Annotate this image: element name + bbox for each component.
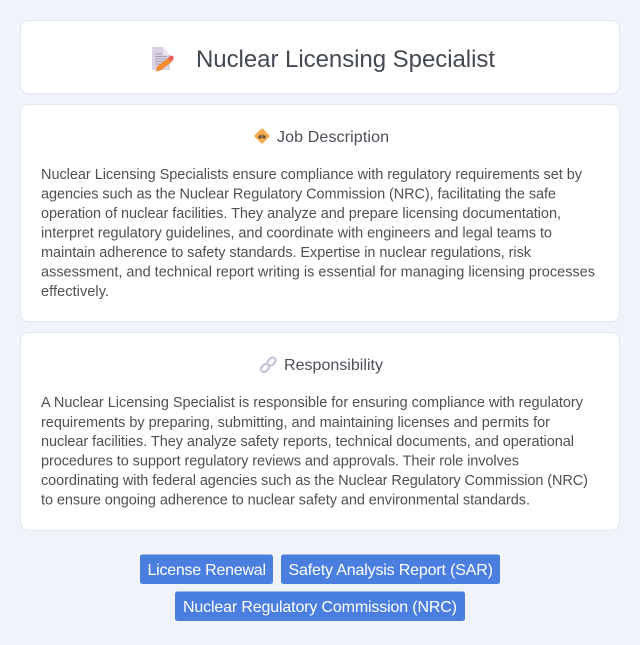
text block: responsibility [41,395,588,508]
icon: warning diamond [254,128,270,144]
text block: job description: effectively. [41,284,109,300]
text block: job description: maintain adherence to safety standards. Expertise in nuclear regulations, risk [41,245,532,261]
text block: job description: interpret regulatory guidelines, and coordinate with engineers and legal teams to [41,226,552,242]
text block: job description: Nuclear Licensing Specialists ensure compliance with regulatory requirements set by [41,167,583,183]
tag: safety analysis report: Safety Analysis Report (SAR) [288,562,493,579]
icon: document with pencil [152,47,174,72]
tag: safety analysis report [281,554,500,584]
icon: chain link [260,356,277,373]
panel: header [20,20,620,94]
text block: responsibility: A Nuclear Licensing Specialist is responsible for ensuring compliance with regulatory [41,395,584,411]
tag: license renewal: License Renewal [148,562,266,579]
title: Nuclear Licensing Specialist [196,46,495,73]
panel: job description [20,104,620,322]
text block: job description: assessment, and technical report writing is essential for managing licensing processes [41,264,595,280]
text block: responsibility: nuclear facilities. They analyze safety reports, technical documents, and operational [41,434,574,450]
text block: responsibility: requirements by preparing, submitting, and maintaining licenses and permits for [41,415,550,431]
text block: job description: agencies such as the Nuclear Regulatory Commission (NRC), facilitating the safe [41,186,556,202]
heading: job description: Job Description [277,129,389,146]
tag: nuclear regulatory commission [175,592,465,621]
text block: responsibility: coordinating with federal agencies such as the Nuclear Regulatory Commission (NRC) [41,473,588,489]
tag: license renewal [140,554,273,584]
tag: nuclear regulatory commission: Nuclear Regulatory Commission (NRC) [183,599,457,616]
heading: responsibility: Responsibility [284,357,383,374]
text block: job description [41,167,595,300]
panel: responsibility [20,332,620,530]
text block: responsibility: to ensure ongoing adherence to nuclear safety and environmental standards. [41,492,530,508]
text block: responsibility: procedures to support regulatory reviews and approvals. Their role involves [41,454,519,470]
text block: job description: operation of nuclear facilities. They analyze and prepare licensing documentation, [41,206,561,222]
